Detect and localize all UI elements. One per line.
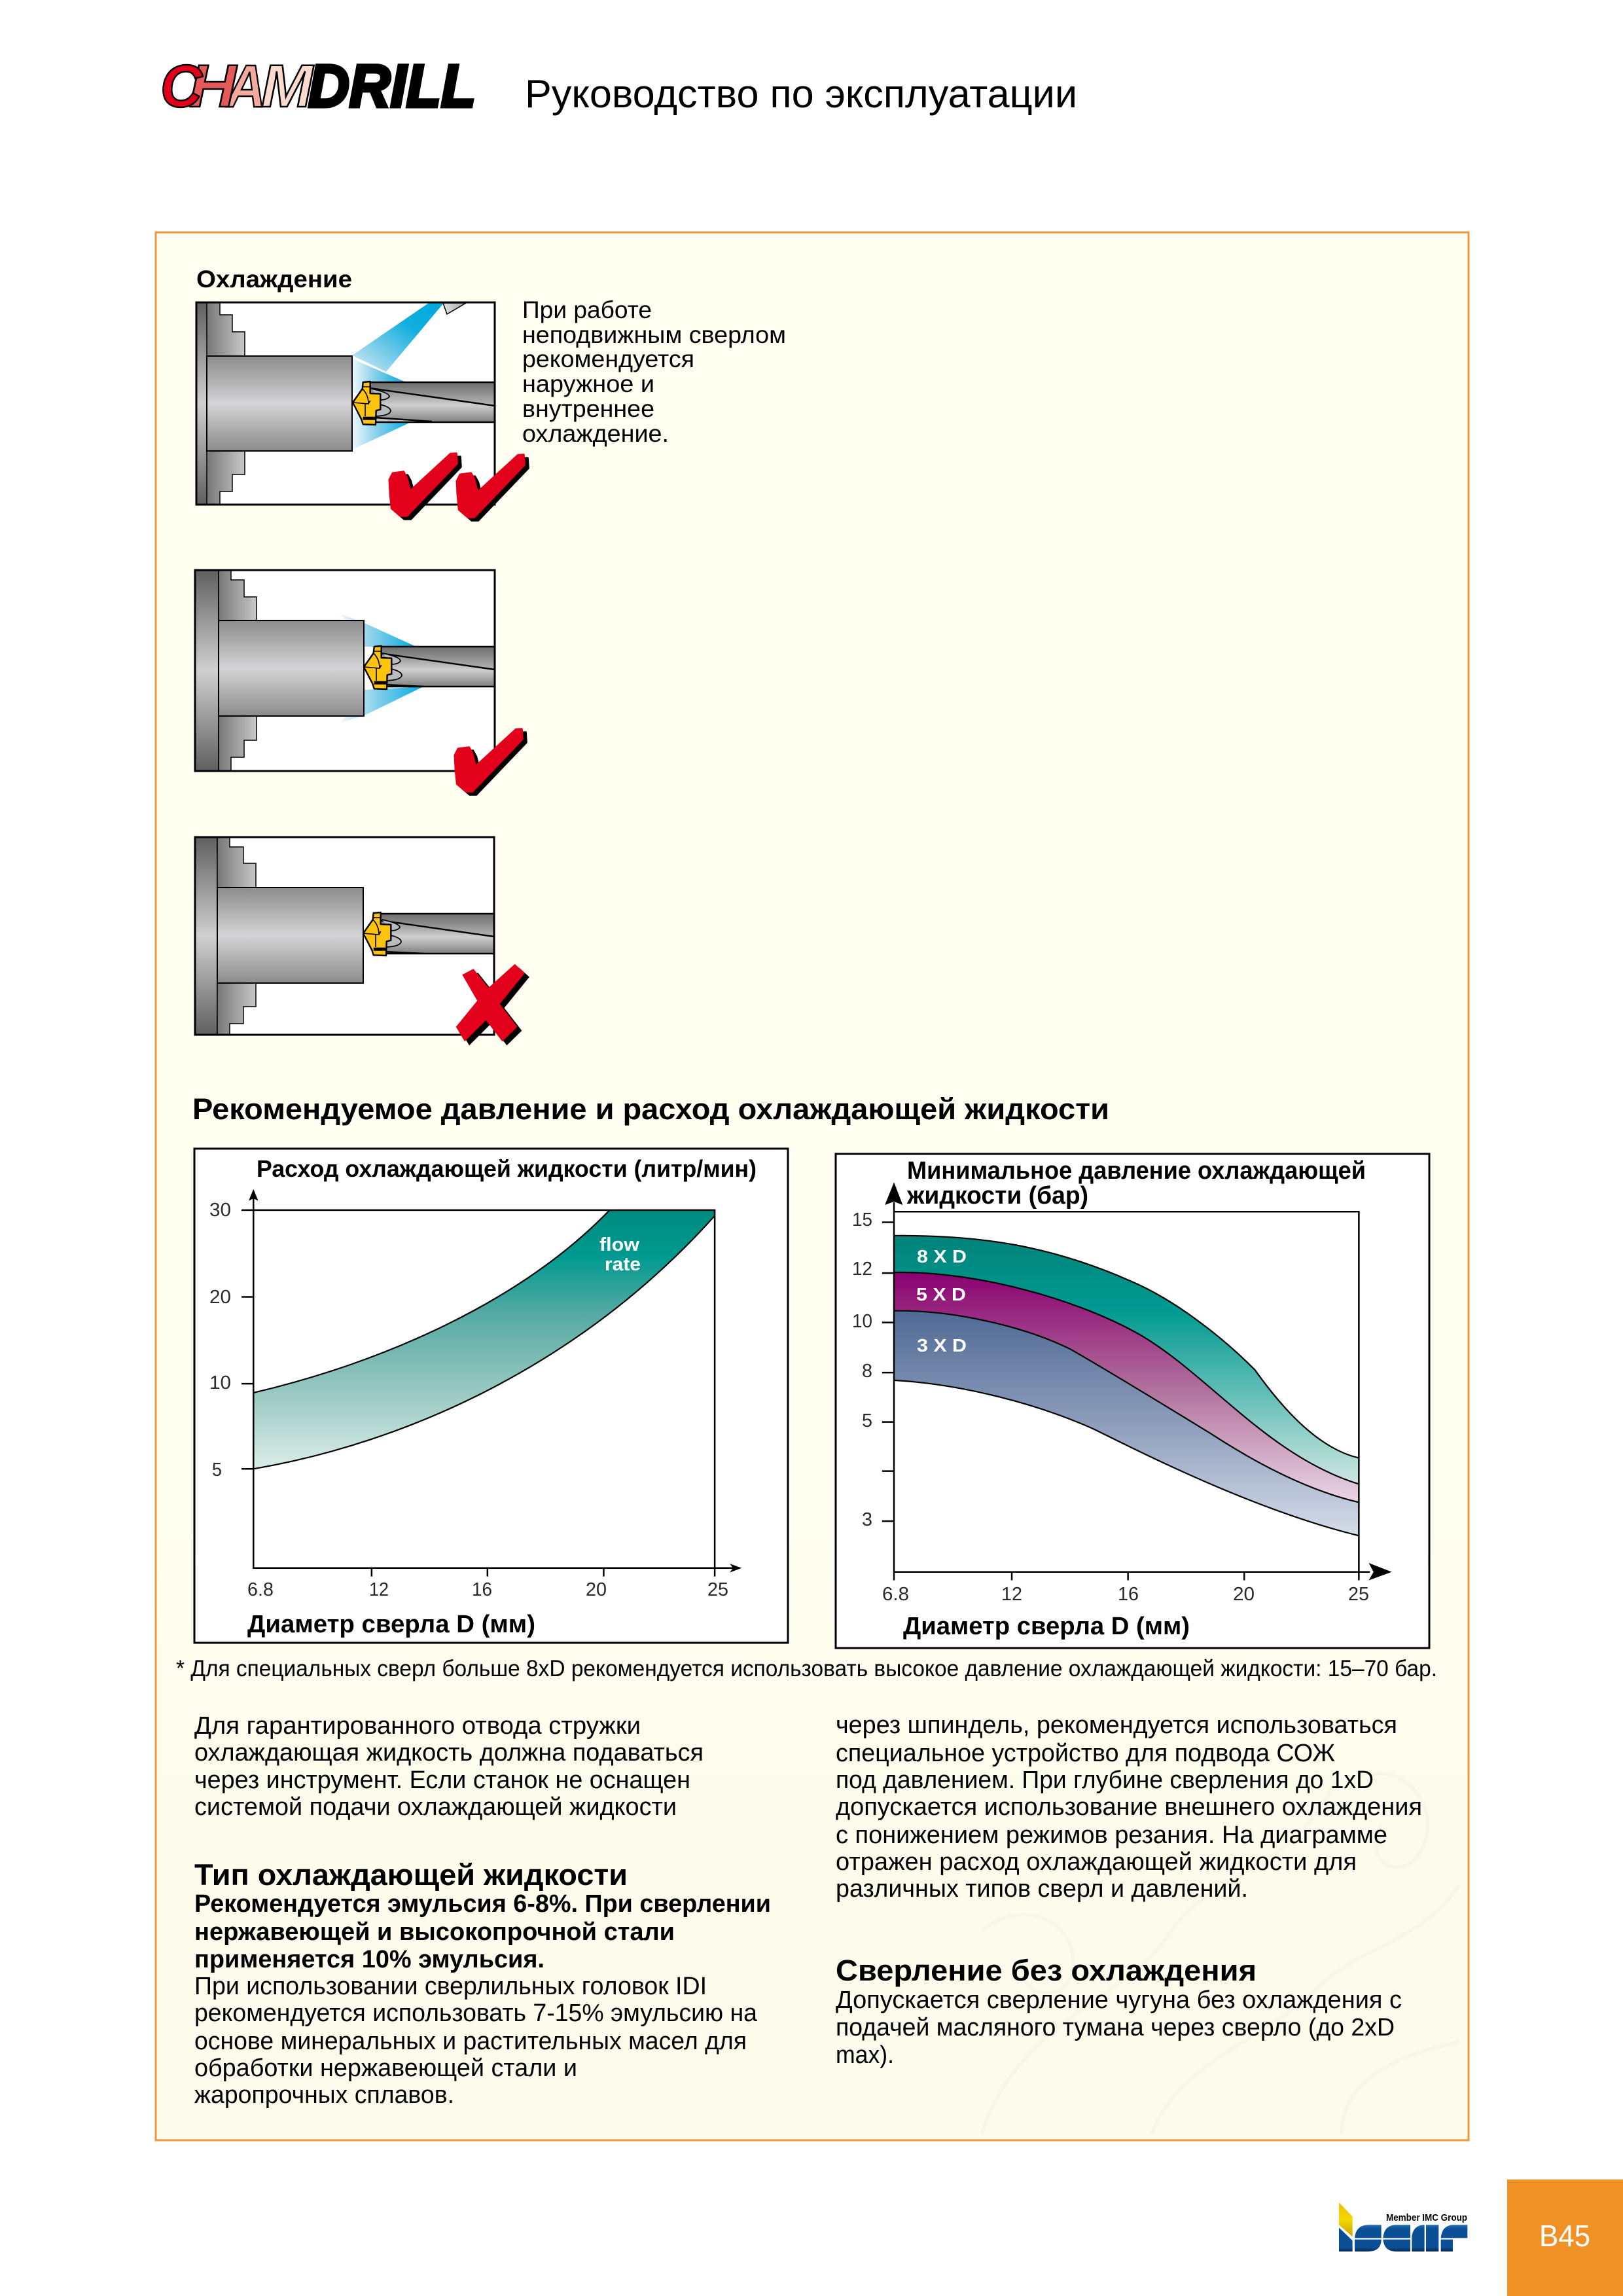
text block: dry drilling: Допускается сверление чугуна без охлаждения с xyxy=(836,1986,1402,2014)
heading: cooling: Охлаждение xyxy=(196,266,352,293)
text block: chip evacuation xyxy=(194,1712,704,1821)
text block: spindle coolant: специальное устройство для подвода СОЖ xyxy=(836,1740,1335,1767)
text block: coolant type: применяется 10% эмульсия. xyxy=(194,1946,544,1973)
page tab: B45: B45 xyxy=(1539,2219,1590,2253)
text block: coolant type: нержавеющей и высокопрочной стали xyxy=(194,1918,675,1946)
text block: spindle coolant: отражен расход охлаждающей жидкости для xyxy=(836,1848,1357,1876)
page tab: B45 xyxy=(1507,2179,1623,2296)
chart title: pressure: жидкости (бар) xyxy=(906,1182,1088,1210)
text block: coolant type: Рекомендуется эмульсия 6-8%. При сверлении xyxy=(194,1890,771,1918)
axis labels: pressure: 6.8 xyxy=(882,1584,909,1605)
text: cooling recommendation xyxy=(522,296,786,447)
logo: CHAMDRILL: A xyxy=(225,53,266,120)
axis labels: pressure: 12 xyxy=(1001,1584,1022,1605)
axis labels: pressure xyxy=(852,1210,1369,1605)
axis labels: flow: 16 xyxy=(472,1579,492,1600)
text block: coolant type: При использовании сверлильных головок IDI xyxy=(194,1973,707,2000)
axis labels: flow: 6.8 xyxy=(247,1579,274,1600)
logo: Iscar xyxy=(1339,2202,1467,2251)
chart title: pressure: Минимальное давление охлаждающей xyxy=(907,1157,1366,1185)
text block: coolant type: обработки нержавеющей стали и xyxy=(194,2054,577,2082)
text block: chip evacuation: Для гарантированного отвода стружки xyxy=(194,1712,641,1740)
tagline: Member IMC Group xyxy=(1386,2212,1467,2223)
logo mark xyxy=(1339,2202,1467,2251)
band labels: 5 X D xyxy=(916,1284,966,1304)
heading: coolant type: Тип охлаждающей жидкости xyxy=(194,1858,628,1892)
logo: CHAMDRILL: M xyxy=(261,53,314,120)
axis labels: flow: 30 xyxy=(209,1200,231,1221)
flow band xyxy=(241,1189,741,1577)
axis labels: pressure: 16 xyxy=(1118,1584,1139,1605)
text: cooling recommendation: При работе xyxy=(522,296,652,323)
x axis title: pressure: Диаметр сверла D (мм) xyxy=(903,1613,1190,1640)
icon: double check xyxy=(389,454,528,520)
icon: red cross xyxy=(456,964,529,1045)
text: cooling recommendation: наружное и xyxy=(522,370,654,397)
chart: minimum pressure xyxy=(836,1154,1429,1648)
text: cooling recommendation: рекомендуется xyxy=(522,346,694,372)
text block: chip evacuation: через инструмент. Если станок не оснащен xyxy=(194,1767,690,1794)
axis labels: flow: 25 xyxy=(707,1579,728,1600)
panel: main content xyxy=(156,232,1469,2140)
diagram: internal cooling xyxy=(195,570,495,771)
axis labels: flow: 5 xyxy=(212,1460,222,1480)
text block: spindle coolant: допускается использование внешнего охлаждения xyxy=(836,1793,1422,1821)
text block: spindle coolant: с понижением режимов резания. На диаграмме xyxy=(836,1821,1387,1849)
pressure bands xyxy=(882,1182,1392,1580)
logo: CHAMDRILL xyxy=(160,53,476,120)
logo: CHAMDRILL: C xyxy=(160,53,203,120)
axis labels: pressure: 20 xyxy=(1233,1584,1255,1605)
chart: coolant flow xyxy=(194,1149,788,1643)
text block: coolant type: рекомендуется использовать 7-15% эмульсию на xyxy=(194,2000,758,2027)
text block: spindle coolant: различных типов сверл и давлений. xyxy=(836,1875,1248,1903)
text block: spindle coolant: под давлением. При глубине сверления до 1xD xyxy=(836,1767,1374,1794)
axis labels: pressure: 10 xyxy=(852,1311,872,1332)
label: flow rate xyxy=(599,1234,641,1275)
band labels: 8 X D xyxy=(917,1246,967,1266)
title: Руководство по эксплуатации xyxy=(525,72,1077,116)
diagram: external and internal cooling xyxy=(196,302,495,505)
axis labels: pressure: 3 xyxy=(862,1509,872,1530)
heading: pressure and flow: Рекомендуемое давление и расход охлаждающей жидкости xyxy=(192,1092,1109,1126)
band labels: 3 X D xyxy=(917,1335,967,1355)
axis labels: flow xyxy=(209,1200,728,1600)
text: cooling recommendation: внутреннее xyxy=(522,395,654,422)
text block: coolant type: жаропрочных сплавов. xyxy=(194,2081,454,2109)
chart title: flow: Расход охлаждающей жидкости (литр/мин) xyxy=(257,1155,757,1182)
axis labels: pressure: 25 xyxy=(1348,1584,1369,1605)
band labels xyxy=(916,1246,967,1355)
axis labels: pressure: 8 xyxy=(862,1361,872,1382)
axis labels: flow: 10 xyxy=(209,1372,231,1393)
logo: CHAMDRILL: DRILL xyxy=(308,53,476,120)
axis labels: flow: 12 xyxy=(369,1579,389,1600)
footnote: * Для специальных сверл больше 8xD рекомендуется использовать высокое давление охлаждающей жидкости: 15–70 бар. xyxy=(176,1656,1437,1681)
chart title: pressure xyxy=(906,1157,1366,1210)
axis labels: flow: 20 xyxy=(586,1579,607,1600)
label: flow rate: rate xyxy=(605,1254,641,1275)
axis labels: pressure: 12 xyxy=(852,1259,872,1280)
text block: chip evacuation: охлаждающая жидкость должна подаваться xyxy=(194,1739,704,1767)
text: cooling recommendation: неподвижным сверлом xyxy=(522,321,786,348)
text block: dry drilling: подачей масляного тумана через сверло (до 2xD xyxy=(836,2014,1395,2041)
text block: chip evacuation: системой подачи охлаждающей жидкости xyxy=(194,1793,677,1821)
text: cooling recommendation: охлаждение. xyxy=(522,420,669,447)
axis labels: pressure: 15 xyxy=(852,1210,872,1230)
diagram: no cooling xyxy=(195,837,494,1035)
text block: coolant type: основе минеральных и растительных масел для xyxy=(194,2028,747,2055)
logo: CHAMDRILL: H xyxy=(189,53,238,120)
text block: dry drilling xyxy=(836,1986,1402,2069)
label: flow rate: flow xyxy=(599,1234,639,1255)
heading: dry drilling: Сверление без охлаждения xyxy=(836,1954,1257,1987)
x axis title: flow: Диаметр сверла D (мм) xyxy=(247,1611,535,1638)
icon: single check xyxy=(455,729,526,795)
text block: spindle coolant: через шпиндель, рекомендуется использоваться xyxy=(836,1712,1397,1739)
text block: coolant type xyxy=(194,1890,771,2109)
text block: dry drilling: max). xyxy=(836,2041,894,2069)
text block: spindle coolant xyxy=(836,1712,1422,1903)
axis labels: flow: 20 xyxy=(209,1287,231,1308)
axis labels: pressure: 5 xyxy=(862,1410,872,1431)
